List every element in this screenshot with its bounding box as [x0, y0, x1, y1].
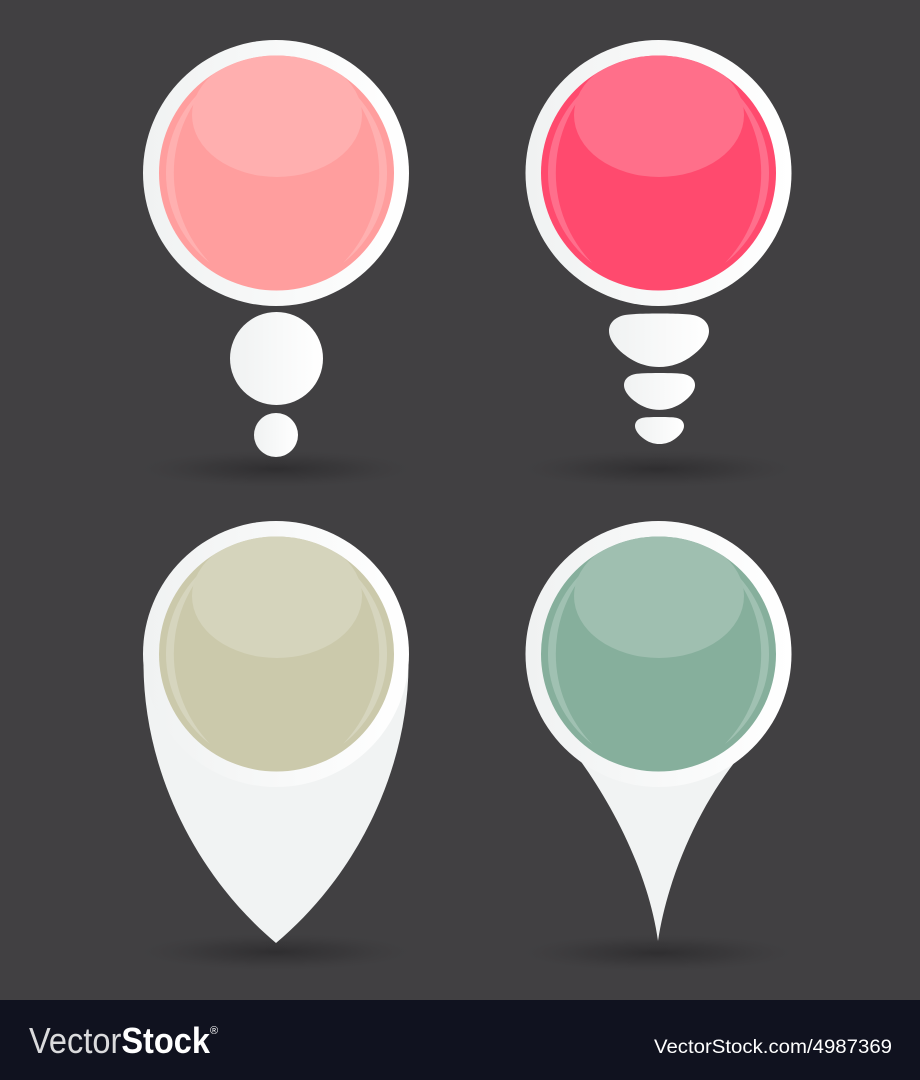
medium segment	[624, 373, 695, 410]
side reflections	[166, 83, 387, 263]
olive face	[159, 536, 394, 772]
white ring	[526, 40, 792, 306]
top highlight	[574, 53, 744, 177]
small dot	[254, 413, 298, 457]
top highlight	[574, 534, 744, 658]
white ring	[143, 521, 409, 787]
marker: green glossy pin with narrow point	[526, 521, 792, 941]
marker: olive glossy pin with wide point	[143, 521, 409, 943]
side reflections	[548, 83, 769, 263]
large dot	[230, 312, 323, 405]
side reflections	[548, 564, 769, 744]
brand logo: VectorStock	[29, 1020, 211, 1061]
image id: VectorStock.com/4987369	[654, 1037, 892, 1058]
wide pin body	[144, 665, 408, 943]
large segment	[609, 314, 709, 367]
white ring	[526, 521, 792, 787]
footer bar	[0, 1000, 920, 1080]
green face	[541, 536, 776, 772]
red face	[541, 56, 776, 290]
small segment	[635, 417, 684, 444]
top highlight	[192, 53, 362, 177]
registered mark: ®	[210, 1025, 218, 1037]
top highlight	[192, 534, 362, 658]
marker: pink glossy button with two white circles	[143, 40, 409, 457]
side reflections	[166, 564, 387, 744]
pink face	[159, 56, 394, 290]
marker: red glossy button with three stacked segments	[526, 40, 792, 444]
white ring	[143, 40, 409, 306]
narrow pin body	[574, 752, 738, 941]
ground shadows	[131, 449, 803, 973]
